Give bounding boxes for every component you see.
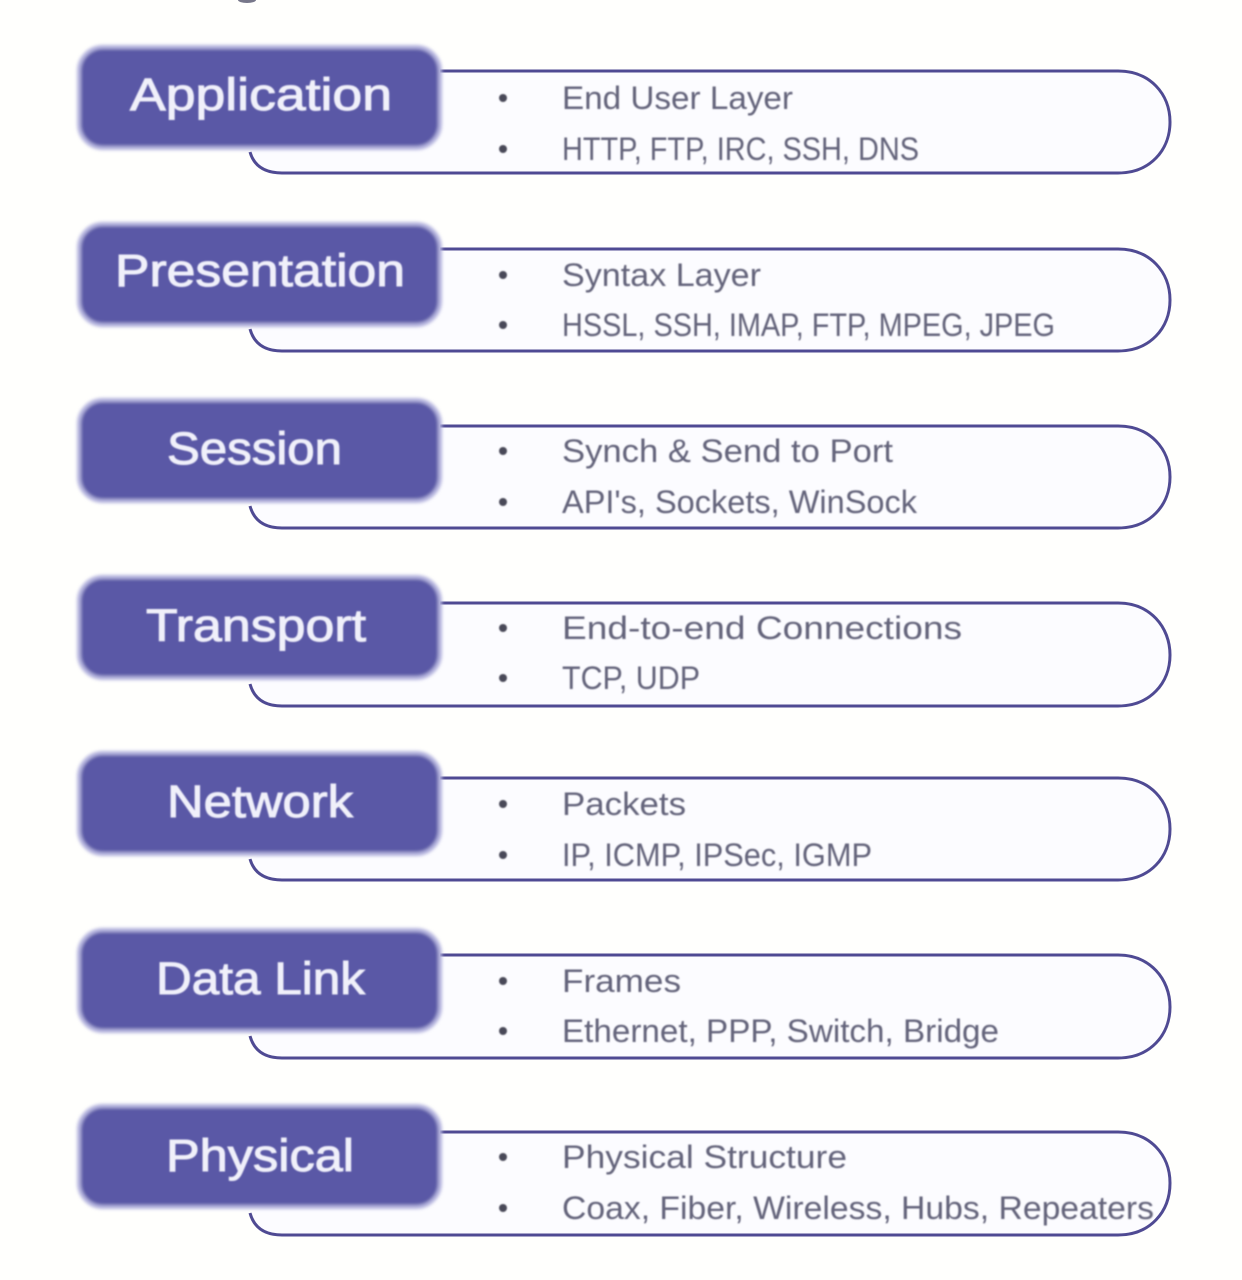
- tab: Application: Application: [130, 69, 392, 120]
- tab: Presentation: Presentation: [115, 245, 405, 296]
- bullet list: Transport: [499, 610, 962, 696]
- panel: Data Link details: [250, 955, 1170, 1058]
- panel: Network details: [250, 778, 1170, 880]
- bullet list: Session: API's, Sockets, WinSock: [562, 484, 918, 520]
- layer row: Network: [79, 753, 1170, 880]
- tab: Network: Network: [167, 776, 354, 827]
- tab: Presentation: [79, 224, 440, 325]
- panel: Transport details: [250, 603, 1170, 706]
- bullet list: Physical: Physical Structure: [562, 1139, 847, 1175]
- layer row: Physical: [79, 1106, 1170, 1235]
- bullet list: Physical: Coax, Fiber, Wireless, Hubs, Repeaters: [562, 1190, 1154, 1226]
- layer row: Application: [79, 47, 1170, 173]
- bullet list: Data Link: Frames: [562, 963, 681, 999]
- bullet list: Application: HTTP, FTP, IRC, SSH, DNS: [562, 131, 919, 167]
- bullet list: Transport: TCP, UDP: [562, 660, 700, 696]
- tab: Data Link: [79, 930, 440, 1031]
- bullet list: Data Link: [499, 963, 999, 1049]
- tab: Physical: Physical: [166, 1130, 354, 1181]
- bullet list: Network: Packets: [562, 786, 686, 822]
- bullet list: Network: [499, 786, 872, 873]
- tab: Application: [79, 47, 440, 148]
- layer row: Transport: [79, 577, 1170, 706]
- layer row: Session: [79, 400, 1170, 528]
- bullet list: Presentation: Syntax Layer: [562, 257, 761, 293]
- bullet list: Physical: [499, 1139, 1154, 1226]
- bullet list: Presentation: HSSL, SSH, IMAP, FTP, MPEG, JPEG: [562, 307, 1055, 343]
- bullet list: Transport: End-to-end Connections: [562, 610, 962, 646]
- bullet list: Network: IP, ICMP, IPSec, IGMP: [562, 837, 872, 873]
- panel: Presentation details: [250, 249, 1170, 351]
- tab: Session: [79, 400, 440, 501]
- tab: Physical: [79, 1106, 440, 1207]
- panel: Session details: [250, 426, 1170, 528]
- bullet list: Presentation: [499, 257, 1055, 343]
- tab: Transport: [79, 577, 440, 678]
- bullet list: Application: [499, 80, 919, 167]
- panel: Physical details: [250, 1132, 1170, 1235]
- tab: Network: [79, 753, 440, 854]
- layer row: Presentation: [79, 224, 1170, 351]
- bullet list: Session: [499, 433, 918, 520]
- panel: Application details: [250, 71, 1170, 173]
- bullet list: Data Link: Ethernet, PPP, Switch, Bridge: [562, 1013, 999, 1049]
- tab: Transport: Transport: [146, 600, 367, 651]
- tab: Session: Session: [167, 423, 342, 474]
- bullet list: Application: End User Layer: [562, 80, 793, 116]
- tab: Data Link: Data Link: [156, 953, 366, 1004]
- layer row: Data Link: [79, 930, 1170, 1058]
- clipped heading remnant: [238, 0, 256, 3]
- bullet list: Session: Synch & Send to Port: [562, 433, 893, 469]
